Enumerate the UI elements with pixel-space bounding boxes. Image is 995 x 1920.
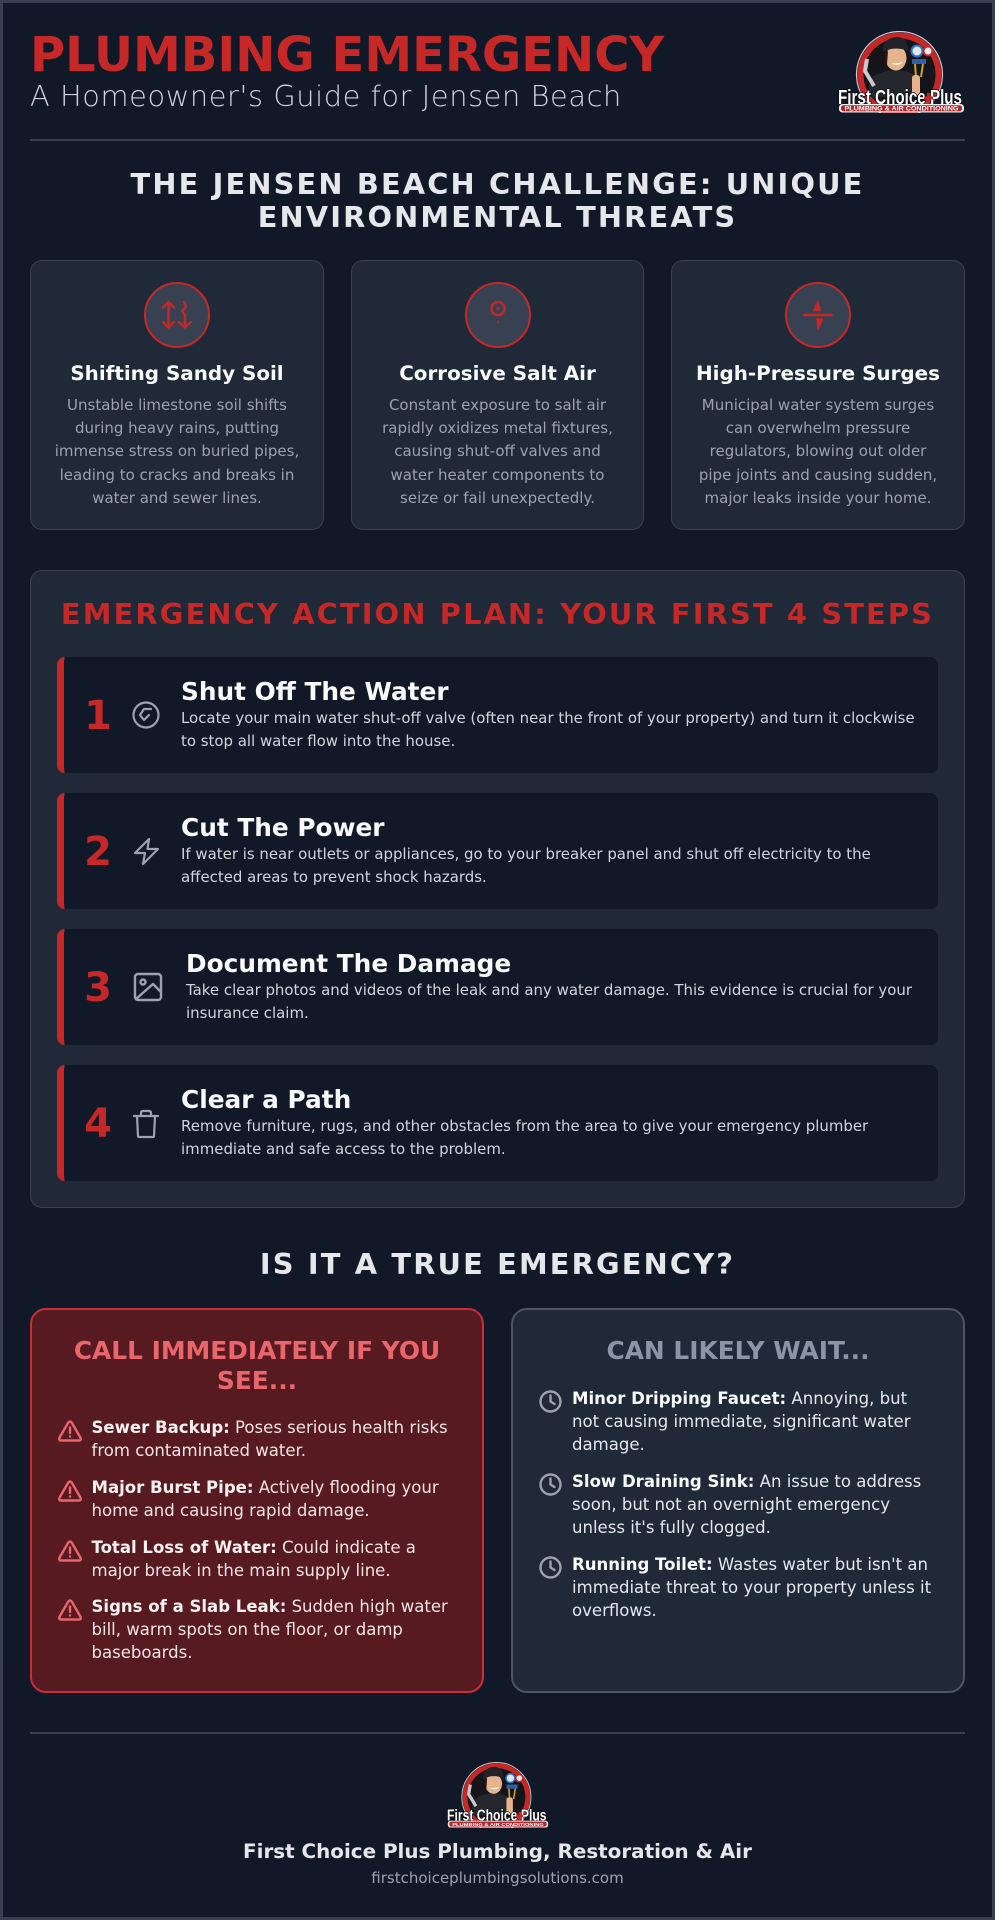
- warning: sewer backup: Sewer Backup: Poses serious health risks: [92, 1418, 448, 1437]
- step 2: [57, 793, 938, 909]
- warning: total loss of water: major break in the main supply line.: [92, 1561, 391, 1580]
- wait item: running toilet: [539, 1555, 931, 1620]
- icon: pressure surge: [785, 282, 851, 348]
- warning: slab leak: [58, 1597, 448, 1662]
- icon: salt droplet: [464, 282, 530, 348]
- panel: high-pressure surges: [671, 260, 965, 530]
- logo: First Choice Plus header: [838, 31, 964, 113]
- panel: can likely wait: [511, 1308, 965, 1693]
- step 1: [57, 657, 938, 773]
- step 4: [57, 1065, 938, 1181]
- footer website: firstchoiceplumbingsolutions.com: [371, 1869, 624, 1887]
- panel heading: SEE...: [217, 1366, 297, 1395]
- step 3: [57, 929, 938, 1045]
- card text: water and sewer lines.: [92, 489, 262, 507]
- step number: 2: [84, 829, 112, 875]
- warning: total loss of water: [58, 1538, 416, 1580]
- icon: photo: [134, 972, 162, 1002]
- wait item: running toilet: immediate threat to your property unless it: [572, 1578, 931, 1597]
- panel heading: CAN LIKELY WAIT...: [606, 1336, 870, 1365]
- step text: [181, 845, 871, 886]
- panel heading: CALL IMMEDIATELY IF YOU: [74, 1336, 440, 1365]
- card text: Municipal water system surges: [702, 396, 934, 414]
- title: PLUMBING EMERGENCY: [30, 27, 664, 83]
- warning: sewer backup: from contaminated water.: [92, 1441, 306, 1460]
- panel: emergency action plan: [30, 570, 965, 1208]
- step text: insurance claim.: [186, 1004, 309, 1022]
- warning: major burst pipe: [58, 1478, 439, 1520]
- panel: corrosive salt air: [351, 260, 644, 530]
- step text: Remove furniture, rugs, and other obstacles from the area to give your emergency plumber: [181, 1117, 868, 1135]
- panel: shifting sandy soil: [30, 260, 324, 530]
- card text: major leaks inside your home.: [705, 489, 931, 507]
- step text: [181, 709, 915, 750]
- wait item: dripping faucet: [539, 1389, 911, 1454]
- step title: Document The Damage: [186, 949, 511, 978]
- card title: Shifting Sandy Soil: [70, 362, 284, 385]
- step title: Clear a Path: [181, 1085, 351, 1114]
- card text: [382, 396, 613, 507]
- card text: water heater components to: [390, 466, 604, 484]
- subtitle: A Homeowner's Guide for Jensen Beach: [30, 79, 622, 113]
- card text: immense stress on buried pipes,: [55, 442, 299, 460]
- icon: valve: [132, 701, 160, 729]
- heading: the Jensen Beach challenge: [130, 166, 864, 234]
- panel heading: [74, 1336, 440, 1395]
- card text: seize or fail unexpectedly.: [400, 489, 595, 507]
- card text: rapidly oxidizes metal fixtures,: [382, 419, 613, 437]
- step text: [186, 981, 912, 1022]
- step text: If water is near outlets or appliances, go to your breaker panel and shut off electricity to the: [181, 845, 871, 863]
- wait item: slow draining sink: unless it's fully clogged.: [572, 1518, 771, 1537]
- step number: 4: [84, 1101, 112, 1147]
- step number: 1: [84, 693, 112, 739]
- step text: affected areas to prevent shock hazards.: [181, 868, 487, 886]
- step title: Shut Off The Water: [181, 677, 449, 706]
- card text: [55, 396, 299, 507]
- heading: emergency action plan: EMERGENCY ACTION PLAN: YOUR FIRST 4 STEPS: [61, 597, 934, 631]
- step number: 3: [84, 965, 112, 1011]
- card text: Unstable limestone soil shifts: [67, 396, 287, 414]
- card title: Corrosive Salt Air: [399, 362, 596, 385]
- card text: pipe joints and causing sudden,: [699, 466, 937, 484]
- card text: Constant exposure to salt air: [389, 396, 606, 414]
- warning: major burst pipe: Major Burst Pipe: Actively flooding your: [92, 1478, 439, 1497]
- warning: slab leak: bill, warm spots on the floor, or damp: [92, 1620, 403, 1639]
- card title: High-Pressure Surges: [696, 362, 940, 385]
- step text: to stop all water flow into the house.: [181, 732, 455, 750]
- step title: Cut The Power: [181, 813, 385, 842]
- wait item: running toilet: Running Toilet: Wastes water but isn't an: [572, 1555, 928, 1574]
- step text: immediate and safe access to the problem.: [181, 1140, 506, 1158]
- warning: total loss of water: Total Loss of Water: Could indicate a: [92, 1538, 416, 1556]
- step text: Locate your main water shut-off valve (often near the front of your property) and turn it clockwise: [181, 709, 915, 727]
- card text: causing shut-off valves and: [394, 442, 601, 460]
- footer company name: First Choice Plus Plumbing, Restoration & Air: [243, 1840, 752, 1863]
- icon: shifting arrows: [144, 282, 210, 348]
- icon: trash: [133, 1110, 159, 1138]
- logo: First Choice Plus footer: PLUMBING & AIR CONDITIONING: [452, 1822, 544, 1828]
- wait item: dripping faucet: damage.: [572, 1435, 645, 1454]
- warning: slab leak: Signs of a Slab Leak: Sudden high water: [92, 1597, 448, 1616]
- icon: lightning bolt: [134, 838, 160, 866]
- wait item: dripping faucet: Minor Dripping Faucet: Annoying, but: [572, 1389, 907, 1408]
- warning: sewer backup: [58, 1418, 448, 1460]
- heading: the Jensen Beach challenge: THE JENSEN BEACH CHALLENGE: UNIQUE: [130, 166, 864, 200]
- step text: [181, 1117, 868, 1158]
- card text: can overwhelm pressure: [726, 419, 910, 437]
- heading: the Jensen Beach challenge: ENVIRONMENTAL THREATS: [258, 200, 737, 234]
- logo: First Choice Plus header: PLUMBING & AIR CONDITIONING: [844, 106, 959, 113]
- wait item: dripping faucet: not causing immediate, significant water: [572, 1412, 911, 1431]
- warning: slab leak: baseboards.: [92, 1643, 193, 1662]
- wait item: slow draining sink: Slow Draining Sink: An issue to address: [572, 1472, 921, 1491]
- card text: during heavy rains, putting: [75, 419, 279, 437]
- card text: leading to cracks and breaks in: [60, 466, 294, 484]
- card text: [699, 396, 937, 507]
- step text: Take clear photos and videos of the leak and any water damage. This evidence is crucial for your: [186, 981, 912, 999]
- wait item: running toilet: overflows.: [572, 1601, 657, 1620]
- card text: regulators, blowing out older: [710, 442, 926, 460]
- warning: major burst pipe: home and causing rapid damage.: [92, 1501, 370, 1520]
- logo: First Choice Plus footer: [447, 1762, 548, 1828]
- wait item: slow draining sink: soon, but not an overnight emergency: [572, 1495, 890, 1514]
- panel: call immediately: [30, 1308, 484, 1693]
- heading: is it a true emergency: IS IT A TRUE EMERGENCY?: [260, 1247, 735, 1281]
- wait item: slow draining sink: [539, 1472, 921, 1537]
